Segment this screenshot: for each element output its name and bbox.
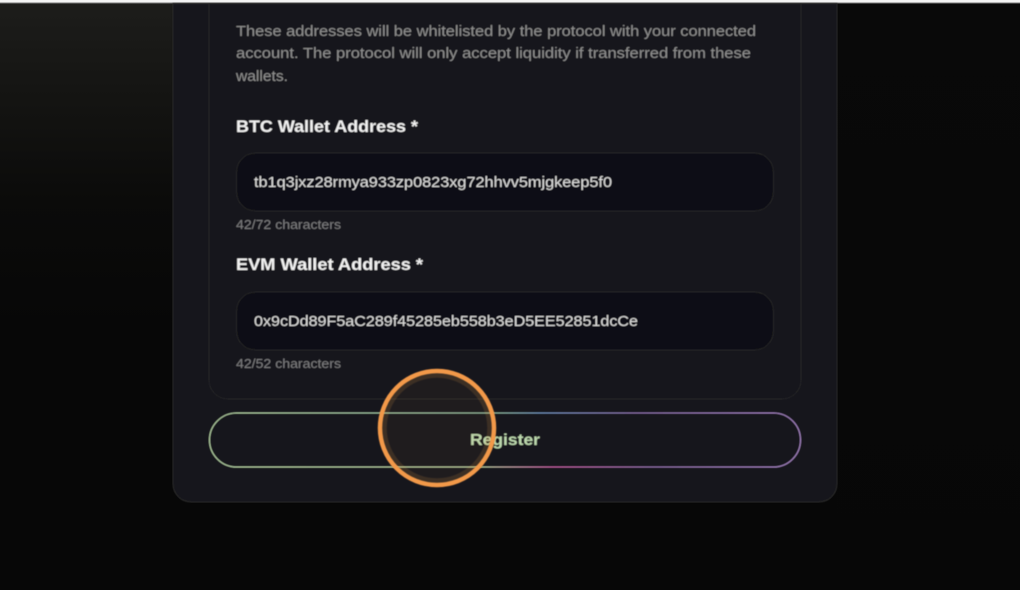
text block: whitelist explanation: account. The protocol will only accept liquidity if transferred from these xyxy=(236,45,751,62)
input: EVM wallet address: 0x9cDd89F5aC289f45285eb558b3eD5EE52851dcCe xyxy=(254,313,638,330)
callout: orange click highlight xyxy=(380,371,494,485)
panel: registration card xyxy=(173,4,837,502)
input: BTC wallet address xyxy=(236,153,774,211)
button: register xyxy=(210,413,800,467)
text block: whitelist explanation: These addresses will be whitelisted by the protocol with your connected xyxy=(236,23,756,40)
character count: BTC: 42/72 characters xyxy=(236,218,341,232)
character count: EVM: 42/52 characters xyxy=(236,357,341,371)
input: EVM wallet address xyxy=(236,292,774,350)
panel: wallet form section xyxy=(209,4,801,399)
input: BTC wallet address: tb1q3jxz28rmya933zp0823xg72hhvv5mjgkeep5f0 xyxy=(254,174,612,191)
text block: whitelist explanation: wallets. xyxy=(235,68,288,85)
heading: EVM wallet address: EVM Wallet Address * xyxy=(236,255,423,274)
text block: whitelist explanation xyxy=(235,23,756,85)
button: register: Register xyxy=(470,432,540,449)
heading: BTC wallet address: BTC Wallet Address * xyxy=(236,117,418,136)
